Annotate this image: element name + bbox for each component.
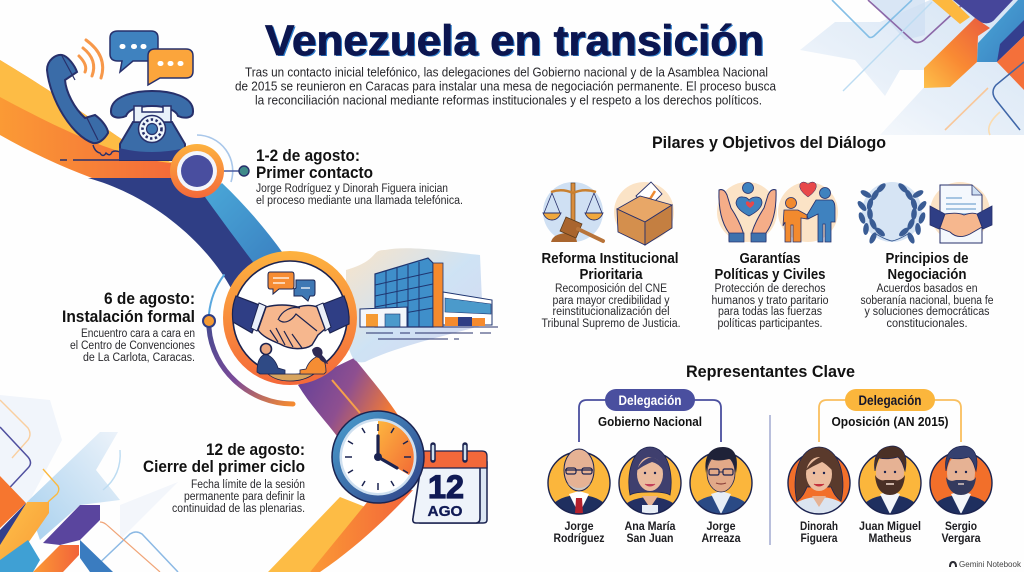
pillar heading [542, 251, 678, 283]
calendar back pages [420, 462, 487, 523]
clock hub [374, 453, 382, 461]
pillar description [860, 283, 994, 330]
building: right wing door [458, 317, 472, 326]
ribbon: yellow lower segment [268, 497, 373, 572]
names [554, 519, 741, 545]
portrait: Jorge Arreaza [690, 447, 752, 514]
node: first milestone [170, 135, 249, 198]
icon: orange chat [268, 272, 294, 294]
building: glass tower [375, 258, 433, 327]
icon: signal waves [79, 40, 103, 78]
names: Ana María [624, 519, 676, 533]
clock elapsed wedge [378, 421, 414, 475]
building: window grid [375, 262, 433, 327]
text: second milestone [62, 290, 195, 364]
endpoint [239, 166, 249, 176]
building: right wing base [445, 317, 485, 326]
delegation: oposición [788, 389, 992, 545]
icon: calendar 12 ago [413, 445, 487, 523]
text: third milestone: Fecha límite de la sesión [191, 479, 305, 491]
building: left wing [360, 307, 407, 327]
icon: caring hands [717, 182, 777, 242]
building backdrop [346, 248, 483, 362]
building: right wing windows [445, 298, 491, 314]
icon: telephone and speech bubbles [47, 31, 193, 160]
divider [769, 415, 771, 545]
text: third milestone: 12 de agosto: [206, 441, 305, 459]
intro paragraph [235, 66, 776, 108]
title: Venezuela en transición [266, 19, 766, 66]
arc around node [197, 135, 233, 182]
pillar description: y soluciones democráticas [864, 306, 990, 318]
icon: left cuff [251, 303, 266, 331]
pillar heading [714, 251, 826, 283]
ribbon: light blue segment [205, 183, 285, 266]
intro paragraph: Tras un contacto inicial telefónico, las delegaciones del Gobierno nacional y de la Asamblea Nacional [245, 66, 768, 80]
icon: telephone body [120, 122, 185, 160]
icon: right head [312, 347, 328, 364]
text: third milestone [143, 441, 306, 515]
pill: delegación [845, 389, 935, 411]
icon: handset dividers [62, 56, 98, 140]
text: second milestone: 6 de agosto: [104, 290, 195, 308]
icon: ballot box [614, 182, 674, 245]
icon: left head [260, 344, 272, 354]
icon: orange bubble dots [160, 61, 181, 66]
bracket [579, 400, 721, 442]
text: second milestone: Instalación formal [62, 308, 195, 326]
white ring [177, 151, 217, 191]
pillar description [542, 283, 680, 330]
icon: laurel wreath [856, 182, 928, 245]
pillar heading: Negociación [888, 267, 966, 283]
intro paragraph: de 2015 se reunieron en Caracas para instalar una mesa de negociación permanente. El proceso busca [235, 80, 776, 94]
decoration: bottom left corner [0, 395, 178, 572]
icon: right person [300, 356, 326, 374]
clock frame [332, 411, 424, 503]
node: second milestone arcs [203, 275, 293, 404]
portrait: Jorge Rodríguez [548, 449, 610, 514]
text: first milestone: 1-2 de agosto: [256, 147, 360, 165]
names: Rodríguez [554, 531, 604, 545]
clock inner rim [340, 418, 416, 496]
text: third milestone: permanente para definir la [184, 491, 306, 503]
calendar inner rings [433, 446, 465, 459]
text: third milestone: Cierre del primer ciclo [143, 458, 305, 476]
heading: representantes clave: Representantes Clave [686, 363, 855, 381]
pillar description: constitucionales. [886, 318, 968, 330]
pillar: reforma institucional [542, 182, 680, 330]
text: first milestone: Jorge Rodríguez y Dinorah Figuera inician [256, 183, 448, 195]
delegation: gobierno nacional [548, 389, 752, 545]
ribbon: yellow highlight [0, 60, 180, 164]
text: second milestone: el Centro de Convenciones [70, 340, 195, 352]
icon: cradle neck [134, 106, 171, 122]
icon: table [268, 374, 314, 381]
icon: two people and heart [778, 182, 838, 242]
pillar heading [886, 251, 968, 283]
names: Juan Miguel [859, 519, 921, 533]
ribbon: dark blue segment [88, 178, 260, 290]
icon: cradle [111, 91, 193, 118]
pillar description: Tribunal Supremo de Justicia. [542, 318, 680, 330]
pillar description: Protección de derechos [714, 283, 826, 295]
icon: blue chat [294, 280, 315, 301]
node: handshake circle [223, 251, 357, 385]
calendar header [421, 451, 487, 468]
portrait: Ana María San Juan [619, 447, 681, 514]
names: Dinorah [800, 519, 838, 533]
text: first milestone: Primer contacto [256, 164, 373, 182]
pillar description: Acuerdos basados en [876, 283, 978, 295]
connector [222, 170, 240, 172]
pillar description: para mayor credibilidad y [552, 295, 670, 307]
pillar: garantías [712, 182, 838, 330]
icon: handset [47, 55, 108, 143]
clock ticks [345, 424, 411, 490]
icon: orange speech bubble [148, 49, 193, 85]
pillar heading: Prioritaria [580, 267, 643, 283]
pillar: principios [856, 182, 994, 330]
icon: right cuff [316, 303, 331, 331]
clock hands [378, 436, 397, 468]
text: first milestone [256, 147, 463, 207]
pillar description: Recomposición del CNE [555, 283, 667, 295]
timeline ribbon [0, 60, 413, 572]
bracket [819, 400, 961, 442]
pill: delegación [605, 389, 695, 411]
outer ring [170, 144, 224, 198]
text: third milestone: continuidad de las plenarias. [172, 503, 305, 515]
pillar heading: Políticas y Civiles [714, 267, 826, 283]
watermark: Gemini Notebook: Gemini Notebook [959, 559, 1022, 569]
ribbon: orange stripe [332, 380, 360, 413]
building: ground lines [360, 327, 498, 339]
calendar rings [433, 445, 465, 460]
title: Venezuela en transición [265, 18, 764, 65]
names [800, 519, 981, 545]
icon: agreement document and handshake [930, 182, 992, 243]
names: Arreaza [702, 531, 741, 545]
calendar month: AGO [428, 503, 463, 520]
text: second milestone: de La Carlota, Caracas. [83, 352, 195, 364]
decoration: top right corner [800, 0, 1024, 135]
inner disc [181, 155, 213, 187]
pillar description [712, 283, 828, 330]
icon: finger lines [270, 308, 317, 348]
names: Vergara [942, 531, 981, 545]
pillar description: para todas las fuerzas [718, 306, 822, 318]
pillar description: soberanía nacional, buena fe [860, 295, 994, 307]
portrait: Dinorah Figuera [788, 447, 850, 514]
building: right wing [443, 292, 492, 325]
pillar description: reinstitucionalización del [552, 306, 670, 318]
building: entrance [385, 314, 400, 327]
portrait: Sergio Vergara [930, 446, 992, 514]
icon: desk line [60, 159, 170, 161]
calendar day: 12 [428, 469, 464, 505]
icon: chat marks [273, 278, 310, 288]
names: Figuera [800, 531, 838, 545]
names: San Juan [626, 531, 674, 545]
pillar heading: Principios de [886, 251, 968, 267]
pillar description: humanos y trato paritario [712, 295, 828, 307]
ribbon: purple segment [298, 358, 400, 440]
names: Jorge [564, 519, 594, 533]
pillar heading: Reforma Institucional [542, 251, 678, 267]
icon: rotary dial [138, 116, 166, 142]
icon: scales of justice [543, 182, 603, 242]
text: first milestone: el proceso mediante una llamada telefónica. [256, 195, 463, 207]
clock face [342, 421, 414, 493]
calendar page [413, 466, 480, 523]
icon: blue bubble dots [122, 44, 144, 49]
subtitle: Gobierno Nacional [598, 414, 702, 429]
portrait: Juan Miguel Matheus [859, 446, 921, 514]
icon: cord [93, 145, 120, 156]
subtitle: Oposición (AN 2015) [832, 414, 948, 429]
text: second milestone: Encuentro cara a cara en [81, 328, 195, 340]
building: left wing shop [366, 314, 378, 327]
icon: left person [257, 354, 285, 374]
icon: right sleeve [318, 296, 349, 333]
icon: clock [332, 411, 424, 503]
building: orange column [433, 263, 443, 327]
ribbon: orange top segment [0, 60, 200, 178]
ribbon: orange lower segment [310, 490, 413, 572]
icon: telephone base [119, 148, 185, 160]
pillar description: políticas participantes. [718, 318, 822, 330]
pill: delegación: Delegación [858, 393, 922, 408]
icon: left sleeve [232, 296, 262, 333]
pill: delegación: Delegación [618, 393, 682, 408]
illustration: convention centre building [346, 248, 498, 362]
icon: blue speech bubble [110, 31, 158, 72]
heading: pilares: Pilares y Objetivos del Diálogo [652, 133, 886, 152]
pillar heading: Garantías [740, 251, 800, 267]
names: Sergio [945, 519, 977, 533]
ring [223, 251, 357, 385]
icon: clasped hands [258, 305, 325, 349]
intro paragraph: la reconciliación nacional mediante reformas institucionales y el respeto a los derechos políticos. [255, 94, 762, 108]
names: Jorge [706, 519, 736, 533]
white disc [233, 261, 347, 375]
names: Matheus [868, 531, 912, 545]
